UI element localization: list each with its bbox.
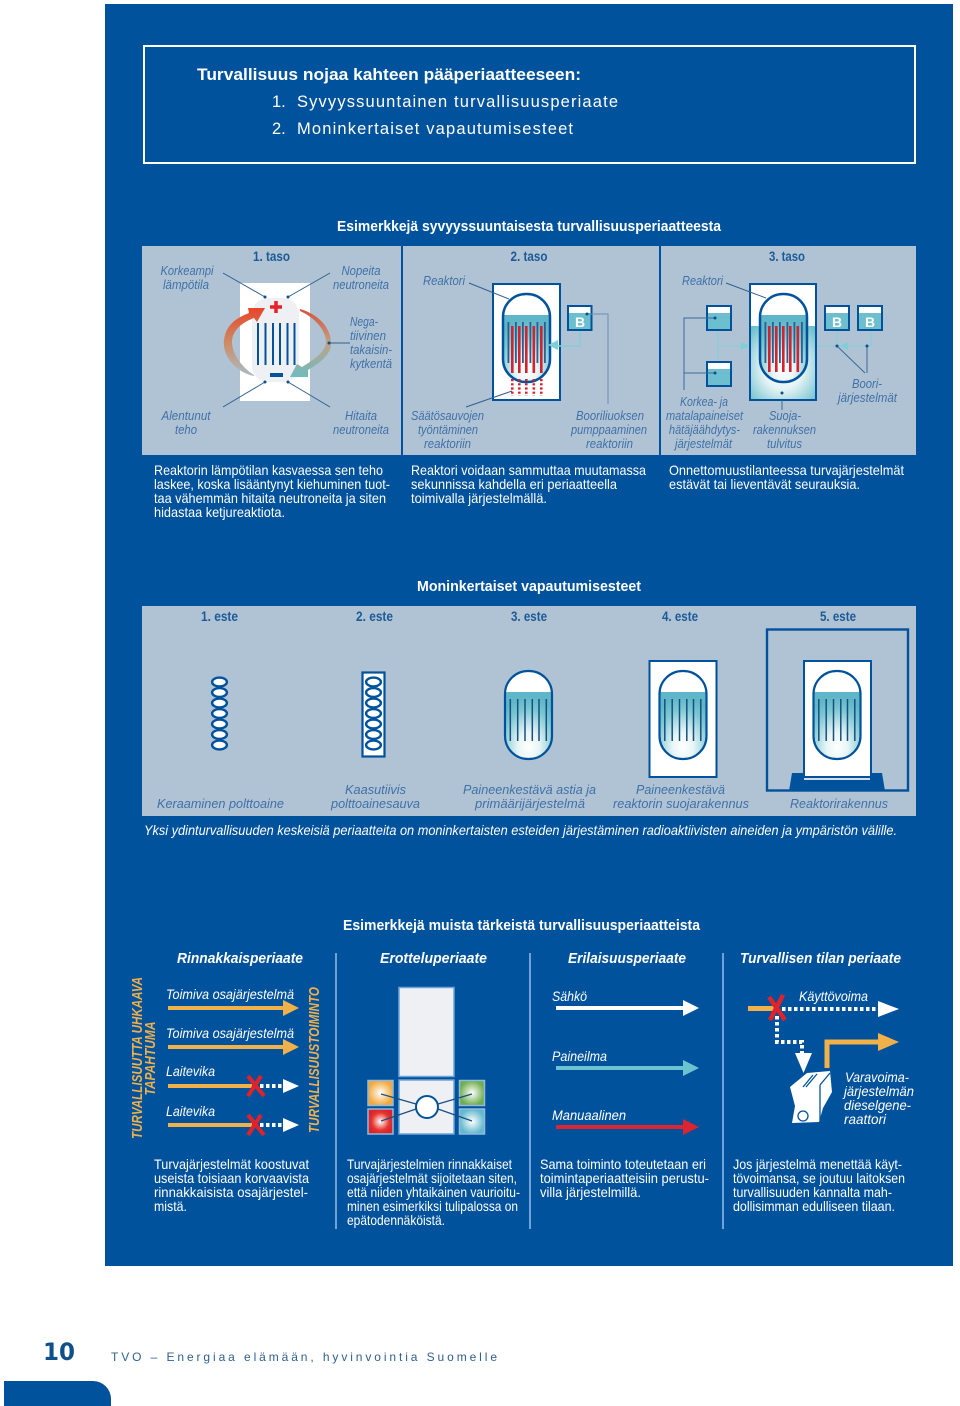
depth level descriptions: Reaktorin lämpötilan kasvaessa sen teho [154, 462, 383, 478]
footer text: TVO – Energiaa elämään, hyvinvointia Suomelle [111, 1350, 497, 1364]
depth level descriptions: toimivalla järjestelmällä. [411, 490, 547, 506]
level 3: Boori- [852, 376, 883, 391]
level 2: pumppaaminen [570, 422, 647, 437]
principle: redundancy: Rinnakkaisperiaate [177, 950, 303, 967]
panel: barriers: 2. este [356, 608, 393, 624]
main blue panel [105, 4, 953, 1266]
barrier 3: pressure vessel [505, 671, 552, 759]
panel: barriers: Paineenkestävä astia ja [463, 782, 596, 797]
level 3 [666, 248, 898, 451]
principle descriptions: tövoimansa, se joutuu laitoksen [733, 1170, 905, 1186]
principle: redundancy: Laitevika [166, 1063, 215, 1079]
principle: safe state: raattori [844, 1111, 887, 1127]
panel: barriers: 4. este [662, 608, 698, 624]
level 1: Hitaita [345, 408, 377, 423]
depth level descriptions: taa vähemmän hitaita neutroneita ja siten [154, 490, 386, 506]
level 2: B [575, 314, 585, 330]
level 2: reaktoriin [586, 436, 633, 451]
principle: safe state: järjestelmän [842, 1083, 914, 1099]
panel: depth levels [142, 246, 916, 455]
principle: diversity: Sähkö [552, 988, 587, 1004]
level 2: työntäminen [418, 422, 478, 437]
principle: diversity: Paineilma [552, 1048, 607, 1064]
panel: barriers: 5. este [820, 608, 856, 624]
panel: barriers [142, 606, 916, 816]
principle descriptions [154, 1156, 905, 1228]
level 1: teho [175, 422, 197, 437]
panel: barriers: reaktorin suojarakennus [613, 796, 749, 811]
principle descriptions: mistä. [154, 1198, 187, 1214]
principle: safe state: Käyttövoima [799, 988, 868, 1004]
barriers caption: Yksi ydinturvallisuuden keskeisiä periaatteita on moninkertaisten esteiden järjestäminen radioaktiivisten aineiden ja ympäristön välille. [144, 822, 897, 838]
principle descriptions: rinnakkaisista osajärjestel- [154, 1184, 308, 1200]
principle: redundancy: TURVALLISUUSTOIMINTO [306, 987, 323, 1133]
level 3: matalapaineiset [666, 408, 744, 423]
page number: 10 [43, 1338, 75, 1366]
level 3: Suoja- [769, 408, 802, 423]
level 2: Booriliuoksen [576, 408, 644, 423]
intro box [144, 46, 915, 163]
feedback arrow: teal [290, 309, 331, 377]
barrier 4: containment [650, 661, 716, 777]
panel: barriers: Keraaminen polttoaine [157, 796, 284, 811]
level 1: neutroneita [333, 277, 389, 292]
principle: redundancy: Laitevika [166, 1103, 215, 1119]
principle descriptions: useista toisiaan korvaavista [154, 1170, 309, 1186]
panel: barriers: primäärijärjestelmä [474, 796, 585, 811]
principle descriptions: Jos järjestelmä menettää käyt- [733, 1156, 902, 1172]
principle: safe state: dieselgene- [844, 1097, 911, 1113]
barrier 2: fuel rod [362, 672, 384, 756]
level 2 [411, 248, 647, 451]
level 3: B [832, 314, 842, 330]
principle: redundancy [129, 950, 323, 1139]
panel: barriers: polttoainesauva [330, 796, 420, 811]
principle descriptions: osajärjestelmät sijoitetaan siten, [347, 1170, 517, 1186]
principle descriptions: villa järjestelmillä. [540, 1184, 641, 1200]
level 2: 2. taso [510, 248, 548, 264]
heading: barriers: Moninkertaiset vapautumisesteet [417, 578, 641, 595]
level 2: Reaktori [423, 273, 466, 288]
panel: barriers: 3. este [511, 608, 547, 624]
principle: redundancy: Toimiva osajärjestelmä [166, 1025, 294, 1041]
level 1: Korkeampi [160, 263, 214, 278]
level 1: lämpötila [163, 277, 209, 292]
arrow [168, 1000, 299, 1016]
level 2: Säätösauvojen [411, 408, 484, 423]
level 3: 3. taso [769, 248, 805, 264]
principle: redundancy: Toimiva osajärjestelmä [166, 986, 294, 1002]
principle: safe state: Varavoima- [845, 1069, 909, 1085]
principle: diversity: Manuaalinen [552, 1107, 626, 1123]
level 1: Nega- [350, 314, 379, 329]
barrier 5: reactor building [767, 630, 908, 791]
level 1: 1. taso [253, 248, 290, 264]
level 1: tiivinen [350, 328, 386, 343]
depth level descriptions: laskee, koska lisääntynyt kiehuminen tuot- [154, 476, 390, 492]
intro list item 2: 2. [272, 120, 286, 138]
intro list item 1: 1. [272, 93, 286, 111]
arrow [168, 1039, 299, 1055]
level 2: reaktoriin [424, 436, 471, 451]
intro list item 1: Syvyyssuuntainen turvallisuusperiaate [297, 93, 618, 111]
panel: barriers: Reaktorirakennus [790, 796, 888, 811]
principle descriptions: turvallisuuden kannalta mah- [733, 1184, 892, 1200]
level 1: Nopeita [342, 263, 380, 278]
level 3: Korkea- ja [680, 394, 728, 409]
principle descriptions: minen esimerkiksi tulipalossa on [347, 1198, 518, 1214]
intro heading: Turvallisuus nojaa kahteen pääperiaatteeseen: [197, 66, 581, 84]
panel: barriers: Paineenkestävä [636, 782, 725, 797]
principle descriptions: dollisimman edulliseen tilaan. [733, 1198, 895, 1214]
depth level descriptions: estävät tai lieventävät seurauksia. [669, 476, 860, 492]
principle: separation: Erotteluperiaate [380, 950, 487, 967]
principle descriptions: toimintaperiaatteisiin perustu- [540, 1170, 709, 1186]
level 1: Alentunut [161, 408, 212, 423]
level 3: rakennuksen [753, 422, 816, 437]
level 3: B [865, 314, 875, 330]
principle descriptions: että niiden yhtaikainen vaurioitu- [347, 1184, 520, 1200]
principle: safe state: Turvallisen tilan periaate [740, 950, 901, 967]
principle descriptions: epätodennäköistä. [347, 1212, 445, 1228]
principle: redundancy: TAPAHTUMA [142, 1022, 159, 1096]
principle descriptions: Turvajärjestelmät koostuvat [154, 1156, 309, 1172]
principle descriptions: Sama toiminto toteutetaan eri [540, 1156, 706, 1172]
level 1 [160, 248, 393, 437]
failed arrow [168, 1115, 299, 1135]
depth level descriptions: hidastaa ketjureaktiota. [154, 504, 285, 520]
icon: diesel generator [790, 1071, 832, 1123]
footer tab [4, 1381, 111, 1406]
level 3: järjestelmät [673, 436, 733, 451]
depth level descriptions: sekunnissa kahdella eri periaatteella [411, 476, 617, 492]
principle: safe state [740, 950, 914, 1127]
panel: barriers: 1. este [201, 608, 238, 624]
principle descriptions: Turvajärjestelmien rinnakkaiset [347, 1156, 512, 1172]
depth level descriptions: Reaktori voidaan sammuttaa muutamassa [411, 462, 646, 478]
failed arrow [168, 1076, 299, 1096]
level 1: kytkentä [350, 356, 392, 371]
panel: barriers: Kaasutiivis [345, 782, 406, 797]
level 1: takaisin- [350, 342, 393, 357]
principle: diversity: Erilaisuusperiaate [568, 950, 686, 967]
principle: diversity [552, 950, 699, 1135]
feedback arrow: red [224, 308, 265, 376]
barrier 1: ceramic fuel [212, 678, 227, 749]
level 3: tulvitus [767, 436, 802, 451]
level 3: Reaktori [682, 273, 724, 288]
principle: redundancy: TURVALLISUUTTA UHKAAVA [129, 977, 146, 1139]
heading: other principles: Esimerkkejä muista tärkeistä turvallisuusperiaatteista [343, 917, 701, 934]
level 1: neutroneita [333, 422, 389, 437]
depth level descriptions: Onnettomuustilanteessa turvajärjestelmät [669, 462, 904, 478]
heading: depth examples: Esimerkkejä syvyyssuuntaisesta turvallisuusperiaatteesta [337, 218, 722, 235]
depth level descriptions [154, 462, 904, 520]
intro list item 2: Moninkertaiset vapautumisesteet [297, 120, 573, 138]
level 3: hätäjäähdytys- [669, 422, 741, 437]
principle: separation [368, 950, 487, 1134]
level 3: järjestelmät [836, 390, 898, 405]
